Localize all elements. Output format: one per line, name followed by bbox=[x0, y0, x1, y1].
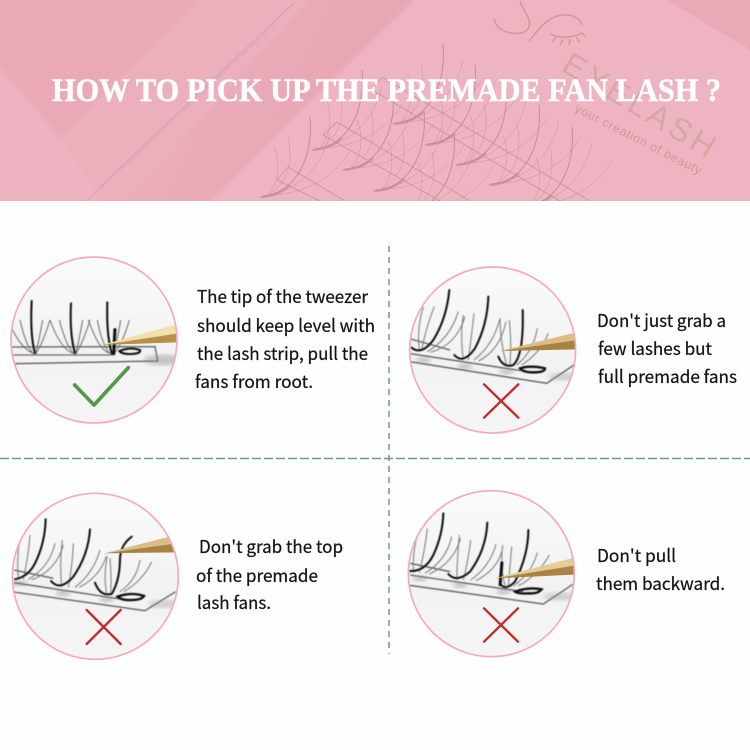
header left packaging shapes bbox=[0, 0, 420, 206]
photo circle: few lashes with red cross bbox=[410, 267, 582, 433]
header logo bbox=[494, 1, 585, 45]
text: pulling backward: them backward. bbox=[596, 571, 725, 596]
text: correct method: fans from root. bbox=[195, 369, 313, 394]
header lash strips bbox=[277, 77, 590, 201]
panel: wrong, grabbing a few lashes bbox=[410, 267, 737, 433]
text: few lashes: full premade fans bbox=[598, 364, 737, 389]
icon: green check bbox=[75, 368, 128, 405]
tweezer bbox=[495, 558, 574, 578]
text: few lashes bbox=[597, 308, 737, 389]
text: few lashes: Don't just grab a bbox=[597, 308, 726, 333]
text: grabbing the top: Don't grab the top bbox=[199, 534, 343, 559]
panel: wrong, grabbing the top bbox=[12, 493, 343, 659]
header lash fans bbox=[260, 44, 612, 212]
text: correct method bbox=[195, 284, 375, 394]
panel: wrong, pulling backward bbox=[408, 491, 725, 657]
text: correct method: The tip of the tweezer bbox=[197, 284, 368, 309]
icon: red cross bbox=[87, 610, 121, 644]
text: correct method: should keep level with bbox=[197, 313, 375, 338]
horizontal dashed divider bbox=[0, 458, 750, 460]
text: pulling backward: Don't pull bbox=[597, 543, 676, 568]
text: few lashes: few lashes but bbox=[598, 336, 712, 361]
header banner bbox=[0, 0, 750, 212]
text: grabbing the top: of the premade bbox=[196, 563, 318, 588]
tweezer bbox=[104, 537, 174, 553]
header brand text: your creation of beauty bbox=[573, 101, 705, 178]
tweezer bbox=[500, 333, 575, 351]
vertical dashed divider bbox=[388, 246, 390, 654]
header brand text: EYELASH bbox=[556, 45, 722, 165]
text: grabbing the top: lash fans. bbox=[197, 590, 271, 615]
text: pulling backward bbox=[596, 543, 725, 596]
photo circle: tweezer at lash top with red cross bbox=[12, 493, 182, 659]
tweezer bbox=[102, 324, 177, 345]
photo circle: pulling backward with red cross bbox=[408, 491, 577, 657]
photo circle: level tweezer with green check bbox=[10, 257, 183, 423]
icon: red cross bbox=[484, 608, 518, 642]
header top-right corner fold bbox=[667, 0, 750, 50]
icon: red cross bbox=[484, 384, 518, 418]
panel: correct method bbox=[10, 257, 375, 423]
text: correct method: the lash strip, pull the bbox=[197, 341, 368, 366]
header faint tweezer line bbox=[85, 2, 295, 203]
text: grabbing the top bbox=[196, 534, 343, 615]
